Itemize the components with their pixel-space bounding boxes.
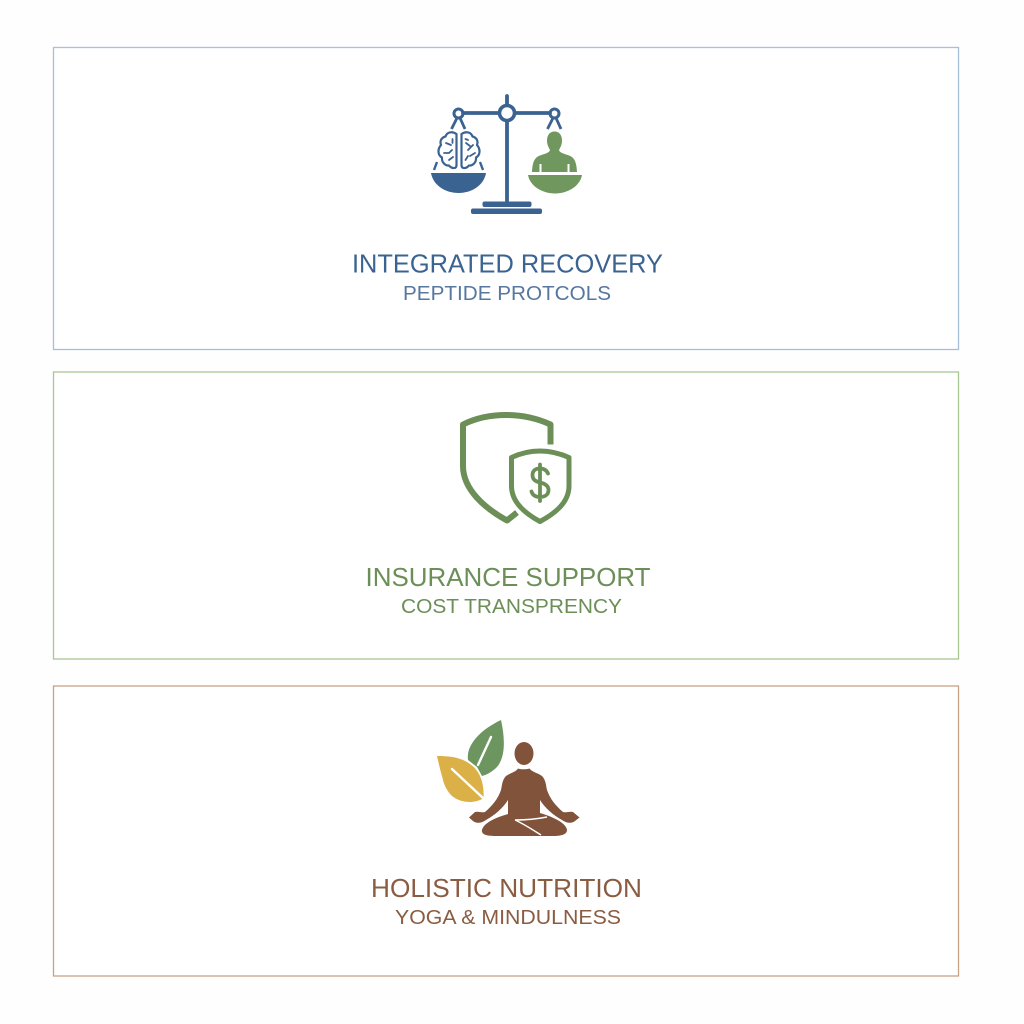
icon: balance scale with brain and body [431, 96, 582, 214]
icon: double shield with dollar [463, 415, 569, 522]
icon: human torso [532, 132, 577, 172]
icon: dollar sign [532, 464, 548, 501]
panel: integrated recovery [54, 48, 958, 350]
title: INSURANCE SUPPORT [366, 562, 651, 592]
icon: leaves and meditating figure [437, 720, 580, 836]
subtitle: COST TRANSPRENCY [401, 595, 622, 618]
icon: green leaf [468, 720, 504, 776]
icon: yellow leaf [437, 756, 484, 802]
subtitle: YOGA & MINDULNESS [395, 906, 621, 929]
title: HOLISTIC NUTRITION [371, 873, 642, 903]
icon: meditating person [469, 742, 580, 836]
panel: holistic nutrition [54, 686, 958, 976]
title: INTEGRATED RECOVERY [352, 248, 663, 278]
icon: brain [438, 132, 480, 168]
subtitle: PEPTIDE PROTCOLS [403, 282, 611, 305]
panel: insurance support [54, 372, 958, 659]
